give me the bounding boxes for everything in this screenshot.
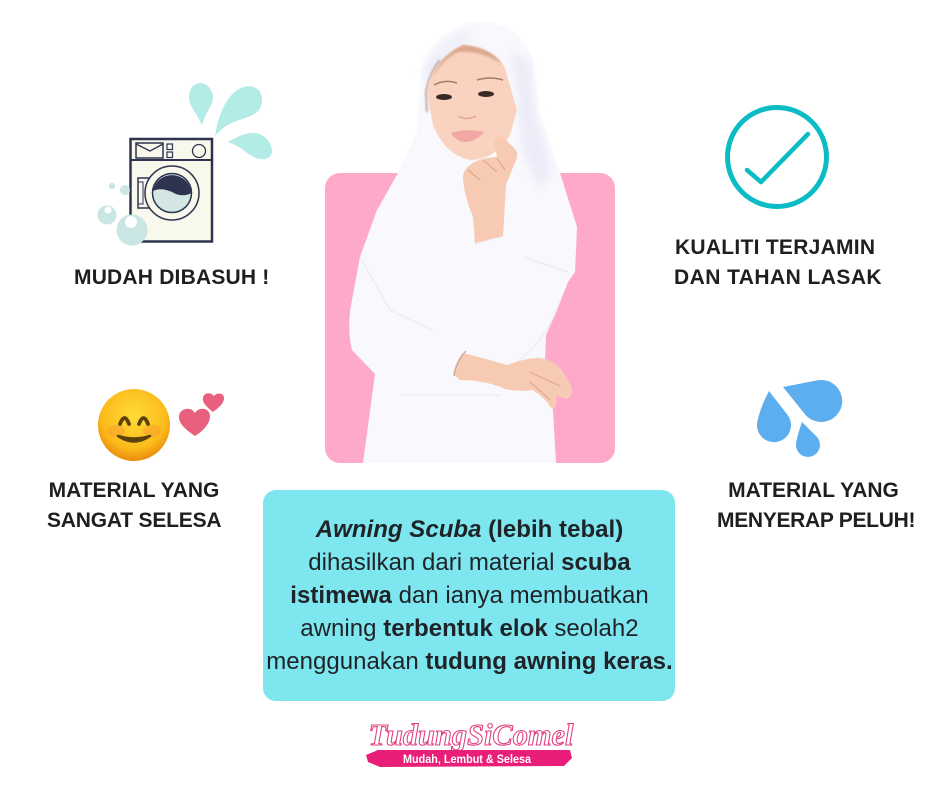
- label: very comfortable material: [47, 479, 221, 532]
- logo wordmark: TudungSiComel: [368, 717, 574, 752]
- hijab side shading: [510, 50, 552, 190]
- label: guaranteed quality: DAN TAHAN LASAK: [674, 266, 882, 289]
- callout: product description: menggunakan tudung awning keras.: [266, 648, 673, 675]
- door: [138, 178, 150, 208]
- callout: product description: istimewa dan ianya membuatkan: [290, 582, 649, 609]
- label: very comfortable material: MATERIAL YANG: [49, 479, 219, 502]
- callout: product description: awning terbentuk elok seolah2: [300, 615, 639, 642]
- resting hand: [453, 353, 572, 409]
- label: guaranteed quality: [674, 236, 882, 289]
- machine body: [130, 139, 212, 242]
- bubbles: [109, 183, 115, 189]
- callout: product description: Awning Scuba (lebih tebal): [316, 516, 623, 543]
- label: sweat absorbing material: [717, 479, 915, 532]
- water splashes: [189, 83, 213, 126]
- label: easy to wash: MUDAH DIBASUH !: [74, 266, 270, 289]
- raised hand: [463, 136, 517, 243]
- hijab opening shadow: [426, 60, 440, 112]
- face: [427, 45, 517, 160]
- eyes and brows: [434, 78, 503, 85]
- panel: pink backdrop: [325, 173, 615, 463]
- dress, hijab and sleeves silhouette: [349, 22, 577, 463]
- logo tagline band: [366, 750, 572, 767]
- nose and mouth: [458, 116, 476, 118]
- label: sweat absorbing material: MENYERAP PELUH!: [717, 509, 915, 532]
- sleeve and drape folds: [360, 236, 568, 395]
- callout: product description: [263, 490, 675, 701]
- hearts: [179, 409, 210, 436]
- label: sweat absorbing material: MATERIAL YANG: [728, 479, 899, 502]
- callout: product description: dihasilkan dari material scuba: [308, 549, 631, 576]
- label: guaranteed quality: KUALITI TERJAMIN: [675, 236, 875, 259]
- logo: Tudung Si Comel: Mudah, Lembut & Selesa: [403, 754, 532, 766]
- label: very comfortable material: SANGAT SELESA: [47, 509, 221, 532]
